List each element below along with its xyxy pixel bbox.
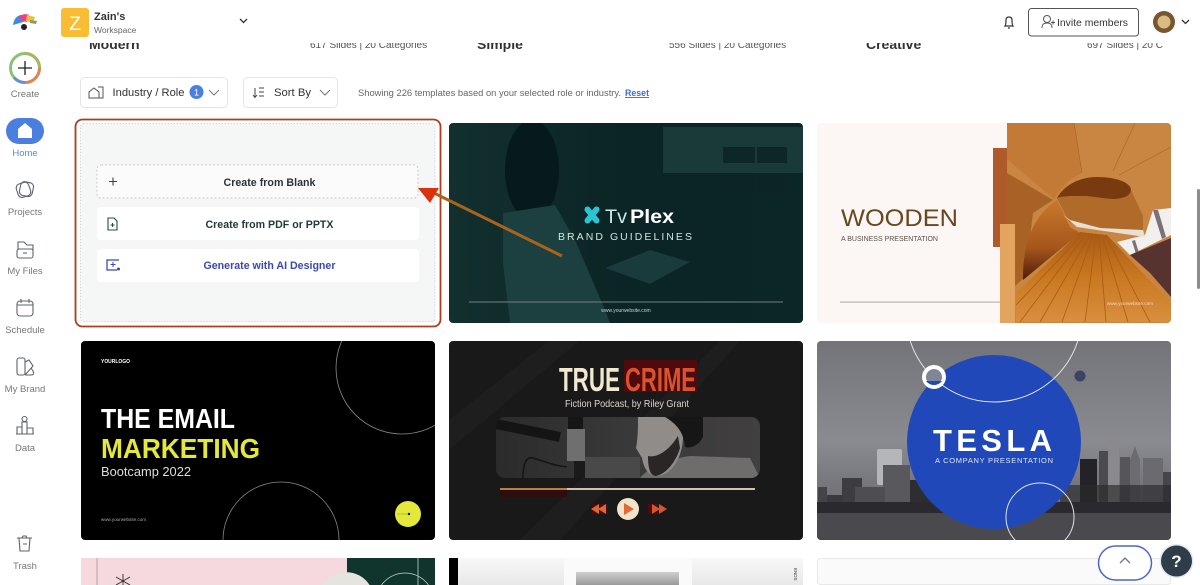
card: true crime template: CRIME	[625, 361, 696, 398]
button: generate with ai: Generate with AI Designer	[204, 260, 336, 272]
card: email marketing template: YOURLOGO	[101, 359, 131, 365]
nav: my files	[7, 242, 43, 277]
icon: brand logo	[13, 14, 37, 30]
scrolled category row: 617 Slides | 20 Categories	[310, 40, 427, 51]
card: tvplex template: Tv	[605, 207, 628, 228]
workspace switcher: Workspace	[94, 25, 137, 35]
card: tvplex template	[449, 120, 803, 323]
scrollbar	[1197, 189, 1200, 289]
icon: notifications bell	[1005, 17, 1013, 28]
button: create from pdf: Create from PDF or PPTX	[206, 219, 334, 231]
filter: sort by	[244, 78, 338, 108]
scrolled category row: Modern	[89, 36, 140, 52]
skyline	[817, 440, 1171, 540]
card: email marketing template: THE EMAIL	[101, 403, 235, 434]
card: email marketing template: Bootcamp 2022	[101, 464, 191, 479]
sidebar	[5, 14, 45, 572]
scrolled category row: Simple	[477, 36, 523, 52]
card: wooden template: www.yourwebsite.com	[1107, 301, 1153, 306]
button: generate with ai	[97, 249, 419, 282]
workspace switcher: Zain's	[94, 11, 125, 23]
create button	[10, 54, 40, 100]
nav: data	[15, 416, 36, 454]
button: create from blank: Create from Blank	[224, 177, 316, 189]
card: true crime template: TRUE	[559, 361, 620, 398]
nav: schedule	[5, 299, 45, 336]
filter: sort by: Sort By	[274, 87, 312, 99]
scrolled category row	[90, 43, 1162, 52]
nav: trash	[13, 536, 37, 572]
nav: home: Home	[12, 148, 38, 159]
filter: industry role: Industry / Role	[112, 87, 184, 99]
arrow: points to create from blank	[418, 188, 562, 256]
card: tvplex template: Plex	[630, 207, 674, 228]
card: grey template partial: ENDS	[793, 568, 798, 581]
user avatar	[1153, 11, 1189, 33]
invite members button: Invite members	[1057, 17, 1128, 29]
card: true crime template	[449, 341, 803, 540]
button: create from pdf	[97, 207, 419, 240]
nav: my brand: My Brand	[5, 384, 45, 395]
nav: trash: Trash	[13, 561, 37, 572]
nav: schedule: Schedule	[5, 325, 45, 336]
card: true crime template: Fiction Podcast, by Riley Grant	[565, 398, 689, 410]
scrolled category row: 556 Slides | 20 Categories	[669, 40, 786, 51]
card: tesla template	[817, 341, 1171, 540]
scrolled category row: 697 Slides | 20 C	[1087, 40, 1163, 51]
invite members button	[1028, 8, 1138, 36]
button: help	[1160, 544, 1194, 578]
workspace switcher	[61, 8, 247, 37]
results summary: Reset	[625, 88, 650, 99]
create button: Create	[11, 89, 39, 100]
card: email marketing template: MARKETING	[101, 433, 260, 464]
scrolled category row: Creative	[866, 36, 921, 52]
nav: my brand	[5, 358, 45, 395]
card: tesla template: A COMPANY PRESENTATION	[935, 456, 1053, 465]
panel: create options	[76, 120, 440, 326]
nav: data: Data	[15, 443, 36, 454]
button: scroll to top	[1098, 546, 1152, 580]
card: pink template partial	[81, 558, 435, 585]
results summary: Showing 226 templates based on your selected role or industry.	[358, 88, 621, 99]
nav: projects: Projects	[8, 207, 42, 218]
card: light template partial	[818, 558, 1170, 584]
filter: industry role	[80, 78, 228, 108]
button: help: ?	[1171, 552, 1182, 571]
nav: projects	[8, 181, 42, 218]
nav: home	[6, 118, 44, 159]
card: email marketing template: www.yourwebsite.com	[101, 517, 146, 522]
card: tvplex template: BRAND GUIDELINES	[558, 231, 692, 243]
card: wooden template	[817, 123, 1171, 323]
card: grey template partial	[449, 558, 803, 585]
card: wooden template: A BUSINESS PRESENTATION	[841, 236, 938, 243]
photo: spiral staircase	[1007, 123, 1171, 323]
card: email marketing template	[81, 341, 435, 540]
card: wooden template: WOODEN	[841, 205, 958, 232]
workspace switcher: Z	[69, 14, 81, 35]
card: tesla template: TESLA	[933, 423, 1052, 458]
button: create from blank	[97, 165, 418, 198]
photo: podcaster at microphone	[496, 417, 760, 478]
nav: my files: My Files	[7, 266, 43, 277]
filter: industry role: 1	[194, 88, 199, 98]
card: tvplex template: www.yourwebsite.com	[601, 308, 651, 314]
